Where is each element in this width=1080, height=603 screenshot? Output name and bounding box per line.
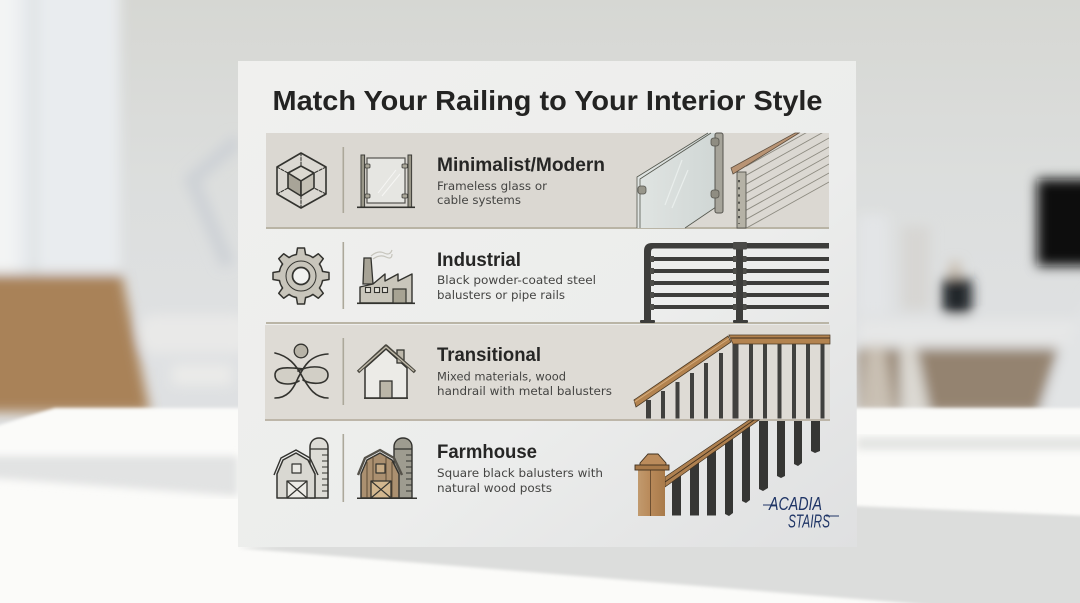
row description: [437, 273, 596, 302]
row heading: Transitional: [437, 345, 541, 366]
row description: Square black balusters with: [437, 466, 603, 480]
logo: Acadia Stairs: [763, 494, 839, 532]
illustration: cable railing: [730, 132, 829, 228]
title: Match Your Railing to Your Interior Style: [272, 85, 822, 116]
row: Industrial: [266, 242, 829, 324]
row description: cable systems: [437, 193, 521, 207]
icon: wooden barn: [357, 438, 417, 499]
row heading: Industrial: [437, 250, 521, 271]
row description: [437, 466, 603, 495]
illustration: black pipe railing: [640, 242, 829, 323]
icon: barn outline: [274, 438, 328, 498]
row: Minimalist/Modern: [266, 132, 829, 229]
illustration: wood handrail with metal balusters: [634, 335, 830, 418]
row: Farmhouse: [274, 420, 839, 532]
row description: Black powder-coated steel: [437, 273, 596, 287]
row description: natural wood posts: [437, 481, 552, 495]
row description: Mixed materials, wood: [437, 370, 566, 384]
icon: factory: [357, 250, 415, 304]
logo: Acadia Stairs: ACADIA: [768, 494, 822, 514]
logo: Acadia Stairs: STAIRS: [788, 512, 830, 532]
row description: [437, 370, 612, 398]
row description: [437, 179, 547, 207]
illustration: square balusters and wood post: [635, 420, 820, 516]
illustration: frameless glass: [637, 133, 723, 228]
row description: balusters or pipe rails: [437, 288, 565, 302]
row description: Frameless glass or: [437, 179, 547, 193]
icon: house: [358, 346, 415, 399]
card: [238, 61, 857, 547]
icon: glass panel: [357, 155, 415, 208]
row heading: Farmhouse: [437, 442, 537, 463]
row: Transitional: [265, 325, 830, 421]
row heading: Minimalist/Modern: [437, 155, 605, 176]
icon: gear: [273, 248, 329, 304]
icon: interlaced curves: [275, 344, 328, 398]
row description: handrail with metal balusters: [437, 384, 612, 398]
icon: hexagonal cube: [277, 153, 326, 208]
